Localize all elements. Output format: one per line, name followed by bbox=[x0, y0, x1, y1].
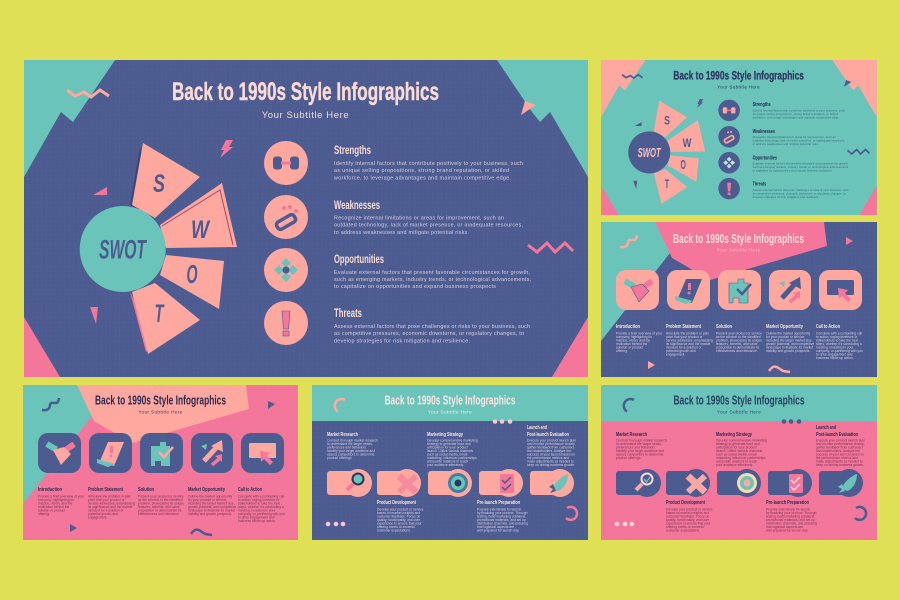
triangle lower left bbox=[90, 307, 98, 324]
icon: rocket bbox=[838, 474, 857, 493]
text: call to action: business follow-up action. bbox=[238, 519, 276, 523]
icon: scroll bbox=[675, 279, 702, 304]
text: solution: features, benefits, and value bbox=[716, 342, 758, 346]
text: marketing strategy: Develop comprehensive marketing bbox=[427, 438, 478, 442]
SWOT wedges: O bbox=[680, 157, 686, 172]
text: call to action: to drive engagement and bbox=[238, 516, 275, 520]
icon: rocket bbox=[549, 474, 568, 493]
text: marketing strategy: your audience effectively. bbox=[716, 463, 753, 467]
text: problem statement: potential growth and bbox=[666, 349, 696, 353]
text: solution: proposition to demonstrate its bbox=[716, 346, 760, 350]
text blocks: as competitive pressures, economic downturns, or regulatory changes, to bbox=[753, 191, 846, 195]
circle: SWOT: SWOT bbox=[638, 145, 661, 160]
text blocks: such as emerging markets, industry trends, or technological advancements, bbox=[753, 165, 849, 169]
text: call to action: to action, urging investors or bbox=[816, 335, 858, 339]
text: marketing strategy: such as social media, email bbox=[716, 452, 757, 456]
text: pre-launch preparation: promotional materials, and set up bbox=[477, 518, 526, 522]
title: Back to 1990s Style Infographics bbox=[384, 394, 516, 408]
text: market research bbox=[616, 432, 667, 460]
panel: teal SWOT slide bbox=[601, 60, 877, 215]
text: launch and evaluation: the performance metrics and bbox=[816, 456, 858, 460]
text: marketing strategy: Develop comprehensive marketing bbox=[716, 438, 767, 442]
text: product development: Product Development bbox=[666, 500, 705, 506]
text: product development: customer feedback. Focus on bbox=[666, 514, 709, 518]
text: problem statement: demand for a solution or bbox=[88, 508, 124, 512]
text: pre-launch preparation: that logistical aspects are bbox=[477, 525, 514, 529]
text: product development: Product Development bbox=[377, 500, 416, 506]
text: launch and evaluation: gather feedback from customers bbox=[816, 446, 864, 450]
text: market opportunity: including the target market size, bbox=[188, 502, 235, 506]
text: problem statement: its significance and the market bbox=[88, 505, 132, 509]
text: introduction: offering. bbox=[616, 349, 628, 353]
text block: weaknesses bbox=[334, 200, 524, 236]
text: call to action: meeting, investing in your bbox=[238, 508, 276, 512]
text: market research: Identify your target audience and bbox=[616, 449, 664, 453]
text: pre-launch preparation: well-prepared for launch day. bbox=[766, 528, 808, 532]
text: pre-launch preparation: that logistical aspects are bbox=[766, 525, 803, 529]
text: market opportunity: landscape to illustrate its market bbox=[188, 508, 235, 512]
text: launch and evaluation: Launch and bbox=[527, 425, 547, 431]
text: launch and evaluation: success of your launch based on bbox=[816, 452, 864, 456]
icon row bbox=[718, 100, 740, 199]
text: market opportunity: growth potential, and competitive bbox=[766, 342, 814, 346]
zigzag top left bbox=[67, 90, 109, 97]
text: launch and evaluation: and stakeholders. Analyze the bbox=[527, 449, 571, 453]
title: Back to 1990s Style Infographics bbox=[673, 69, 804, 83]
text: market research: preferences and behaviors. bbox=[616, 446, 656, 450]
text: marketing strategy bbox=[427, 432, 478, 467]
text: introduction: solution or product bbox=[38, 508, 65, 512]
text: call to action: Conclude with a compelling call bbox=[816, 332, 862, 336]
text: problem statement: Problem Statement bbox=[666, 324, 701, 330]
text blocks: Threats bbox=[753, 182, 766, 188]
text: introduction: company, highlighting its bbox=[38, 498, 74, 502]
text: market opportunity: growth potential, and competitive bbox=[188, 505, 236, 509]
text: introduction: motivation behind the bbox=[616, 342, 648, 346]
title: Back to 1990s Style Infographics bbox=[674, 394, 805, 408]
icon: target bbox=[448, 473, 468, 493]
circle: SWOT bbox=[80, 206, 166, 292]
text block: weaknesses: Weaknesses bbox=[334, 200, 380, 212]
icon tabs bbox=[616, 469, 863, 497]
text: call to action: to action, urging investors or bbox=[238, 498, 280, 502]
text: market research: Conduct thorough market research bbox=[327, 438, 378, 442]
wedge: S: S bbox=[153, 170, 165, 198]
text: pre-launch preparation: Prepare extensively for launch bbox=[477, 508, 522, 512]
text block: weaknesses: to address weaknesses and mitigate potential risks. bbox=[334, 230, 469, 236]
icon: scroll bbox=[97, 442, 124, 467]
text blocks: to address weaknesses and mitigate potential risks. bbox=[753, 142, 819, 146]
text: problem statement: engagement. bbox=[666, 352, 685, 356]
text: marketing strategy: strategy to generate buzz and bbox=[716, 442, 760, 446]
title: Back to 1990s Style Infographics bbox=[95, 394, 226, 408]
zigzag right bbox=[528, 243, 573, 252]
text: call to action: company, or partnering with you bbox=[238, 512, 285, 516]
subtitle: Your Subtitle Here bbox=[716, 248, 761, 254]
text: call to action bbox=[238, 487, 285, 523]
text: pre-launch preparation: Pre-launch Preparation bbox=[766, 500, 809, 506]
text: problem statement: demand for a solution or bbox=[666, 346, 702, 350]
text: launch and evaluation: Launch and bbox=[816, 425, 836, 431]
text block: opportunities bbox=[334, 254, 532, 290]
text: marketing strategy bbox=[716, 432, 767, 467]
text: market research: product offerings. bbox=[616, 456, 641, 460]
text: launch and evaluation: Execute your product launch plan bbox=[527, 438, 576, 442]
text block: weaknesses: Recognize internal limitations or areas for improvement, such an bbox=[334, 216, 504, 222]
wedge: T: T bbox=[154, 300, 165, 328]
text blocks: to capitalize on opportunities and expand business prospects bbox=[753, 168, 832, 172]
text block: threats: Assess external factors that pose challenges or risks to your business, such bbox=[334, 324, 530, 330]
icon: magnifier bbox=[636, 474, 652, 490]
text: problem statement: point that your product or bbox=[88, 498, 126, 502]
SWOT wedges: T bbox=[665, 177, 670, 191]
text: product development: customer expectations. bbox=[377, 528, 411, 532]
text: launch and evaluation bbox=[816, 425, 865, 467]
text: marketing strategy: your audience effectively. bbox=[427, 463, 464, 467]
text: market opportunity: viability and growth prospects. bbox=[188, 512, 232, 516]
icon: target bbox=[737, 473, 757, 493]
text: market research: preferences and behaviors. bbox=[327, 446, 367, 450]
text blocks: Recognize internal limitations or areas for improvement, such an bbox=[753, 135, 836, 139]
text: solution: Solution bbox=[138, 487, 154, 493]
text: call to action bbox=[816, 324, 863, 360]
icon: dumbbell bbox=[264, 141, 308, 185]
text: market opportunity: including the target market size, bbox=[766, 338, 813, 342]
text: product development: based on market insights and bbox=[666, 511, 709, 515]
SWOT wedges bbox=[654, 101, 705, 204]
text: introduction: mission, vision, and the bbox=[616, 338, 650, 342]
triangle top right bbox=[521, 101, 536, 115]
wedge: T bbox=[130, 283, 200, 354]
text: marketing strategy: launch. Utilize various channels bbox=[716, 449, 763, 453]
text blocks: workforce, to leverage advantages and maintain competitive edge. bbox=[753, 115, 839, 119]
text: launch and evaluation: Post-launch Evaluation bbox=[527, 432, 569, 438]
text: problem statement: service addresses, emphasizing bbox=[88, 502, 135, 506]
text block: strengths: Strengths bbox=[334, 145, 371, 157]
icon: screen with cursor bbox=[249, 443, 276, 465]
text: product development: customer feedback. Focus on bbox=[377, 514, 420, 518]
text: market opportunity: for your product or service, bbox=[766, 335, 805, 339]
text: pre-launch preparation: distribution channels, and ensuring bbox=[766, 522, 817, 526]
text: launch and evaluation: and monitor performance closely, bbox=[816, 442, 865, 446]
icon: lightning bbox=[220, 140, 233, 158]
text: problem statement: service addresses, emphasizing bbox=[666, 338, 713, 342]
text blocks: Strengths bbox=[753, 102, 771, 108]
cards with icons bbox=[616, 270, 862, 310]
text blocks: Opportunities bbox=[753, 155, 777, 161]
wedge: O bbox=[160, 255, 224, 309]
text: product development: based on market insights and bbox=[377, 511, 420, 515]
text: launch and evaluation: make adjustments as needed to bbox=[527, 460, 574, 464]
icon: exclamation bbox=[264, 301, 308, 345]
text: solution: effectiveness and relevance. bbox=[716, 349, 758, 353]
wedge: S bbox=[130, 143, 200, 218]
text block: strengths bbox=[333, 145, 523, 182]
wedge: O: O bbox=[186, 259, 198, 289]
panel: pink timeline slide bbox=[601, 385, 877, 540]
text: market opportunity: Outline the market opportunity bbox=[766, 332, 811, 336]
text: introduction bbox=[616, 324, 663, 353]
text: product development: customer expectations. bbox=[666, 528, 700, 532]
circle: SWOT bbox=[628, 131, 670, 173]
title: Back to 1990s Style Infographics bbox=[673, 232, 804, 246]
text: product development: quality, functionality, and user bbox=[666, 518, 710, 522]
text block: strengths: as unique selling propositions, strong brand reputation, or skilled bbox=[334, 168, 509, 174]
icon tabs bbox=[327, 469, 574, 497]
text: product development bbox=[377, 500, 424, 532]
text: market opportunity: landscape to illustrate its market bbox=[766, 346, 813, 350]
text: pre-launch preparation bbox=[766, 500, 817, 532]
text: launch and evaluation: and stakeholders. Analyze the bbox=[816, 449, 860, 453]
text: pre-launch preparation: testing, build marketing collateral, bbox=[766, 514, 815, 518]
text: market opportunity: Market Opportunity bbox=[188, 487, 225, 493]
text block: opportunities: to capitalize on opportunities and expand business prospects bbox=[334, 284, 496, 290]
text: marketing strategy: Marketing Strategy bbox=[716, 432, 752, 438]
text blocks: as unique selling propositions, strong brand reputation, or skilled bbox=[753, 112, 839, 116]
text block: opportunities: such as emerging markets, industry trends, or technological advancements, bbox=[334, 277, 532, 283]
text: market research: Market Research bbox=[327, 432, 358, 438]
text: call to action: company, or partnering with you bbox=[816, 349, 863, 353]
icon: handshake bbox=[45, 441, 76, 465]
text block: opportunities: Evaluate external factors that present favorable circumstances for growth, bbox=[334, 270, 530, 276]
text: call to action: stakeholders to take the next bbox=[816, 338, 858, 342]
text: problem statement bbox=[666, 324, 713, 356]
icon: arrows bbox=[201, 440, 223, 465]
text: introduction: Provide a brief overview of your bbox=[38, 494, 85, 498]
text: launch and evaluation: keep on driving business growth. bbox=[816, 463, 864, 467]
text: marketing strategy: anticipation for your product bbox=[716, 446, 757, 450]
icon: screen with cursor bbox=[827, 280, 854, 302]
text: marketing strategy: marketing, influencer partnerships bbox=[427, 456, 477, 460]
text: market research: Conduct thorough market research bbox=[616, 438, 667, 442]
text: launch and evaluation: gather feedback from customers bbox=[527, 446, 575, 450]
icon: puzzle bbox=[729, 279, 751, 303]
panel: navy timeline slide bbox=[312, 385, 588, 540]
text block: opportunities: Opportunities bbox=[334, 254, 384, 266]
text: product development: experience to ensure that your bbox=[666, 522, 711, 526]
text: pre-launch preparation: distribution channels, and ensuring bbox=[477, 522, 528, 526]
text: solution: problem, showcasing its unique bbox=[138, 502, 184, 506]
text: market research: to understand the target needs, bbox=[327, 442, 373, 446]
text: call to action: Call to Action bbox=[238, 487, 262, 493]
text: market opportunity: Market Opportunity bbox=[766, 324, 803, 330]
icon: pencil and ruler bbox=[399, 476, 416, 492]
text: market research: assess competitors to determine bbox=[327, 452, 375, 456]
text: solution: as the solution to the identified bbox=[138, 498, 183, 502]
text: pre-launch preparation: well-prepared for launch day. bbox=[477, 528, 519, 532]
text: launch and evaluation: keep on driving business growth. bbox=[527, 463, 575, 467]
text: launch and evaluation: make adjustments as needed to bbox=[816, 460, 863, 464]
text: market research: product offerings. bbox=[327, 456, 352, 460]
text: pre-launch preparation: Pre-launch Preparation bbox=[477, 500, 520, 506]
text: solution bbox=[138, 487, 184, 516]
text: product development bbox=[666, 500, 713, 532]
text: introduction: Introduction bbox=[38, 487, 62, 493]
text block: threats bbox=[334, 308, 530, 344]
text: problem statement: its significance and the market bbox=[666, 342, 710, 346]
text: introduction: company, highlighting its bbox=[616, 335, 652, 339]
text: marketing strategy: and public relations to reach bbox=[716, 460, 757, 464]
text: market opportunity bbox=[766, 324, 814, 353]
text: problem statement: Articulate the problem or pain bbox=[88, 494, 131, 498]
text block: threats: Threats bbox=[334, 308, 362, 320]
text: product development: quality, functionality, and user bbox=[377, 518, 421, 522]
text: product development: Develop your product or service bbox=[666, 508, 713, 512]
text block: weaknesses: outdated technology, lack of market presence, or inadequate resources, bbox=[334, 222, 524, 228]
text: marketing strategy: launch. Utilize various channels bbox=[427, 449, 474, 453]
text blocks bbox=[753, 102, 849, 199]
text: solution: features, benefits, and value bbox=[138, 505, 180, 509]
text: pre-launch preparation bbox=[477, 500, 528, 532]
text: problem statement: Articulate the problem or pain bbox=[666, 332, 709, 336]
text: market research bbox=[327, 432, 378, 460]
text: product development: Develop your product or service bbox=[377, 508, 424, 512]
text blocks: Evaluate external factors that present favorable circumstances for growth, bbox=[753, 162, 849, 166]
panel: main SWOT slide bbox=[24, 60, 588, 377]
panel: pink five-card slide bbox=[23, 385, 298, 540]
icon: clipboard bbox=[500, 474, 514, 493]
text: marketing strategy: and public relations to reach bbox=[427, 460, 468, 464]
text: introduction: Introduction bbox=[616, 324, 640, 330]
text: solution bbox=[716, 324, 762, 353]
text: call to action: Conclude with a compelling call bbox=[238, 494, 284, 498]
text: call to action: business follow-up action. bbox=[816, 356, 854, 360]
text: introduction: motivation behind the bbox=[38, 505, 70, 509]
subtitle: Your Subtitle Here bbox=[717, 410, 761, 416]
text: pre-launch preparation: promotional materials, and set up bbox=[766, 518, 815, 522]
text blocks: Assess external factors that pose challenges or risks to your business, such bbox=[753, 188, 849, 192]
text: introduction: solution or product bbox=[616, 346, 643, 350]
text: market opportunity bbox=[188, 487, 236, 516]
subtitle: Your Subtitle Here bbox=[428, 410, 472, 416]
text: introduction: Provide a brief overview of your bbox=[616, 332, 663, 336]
icon: clipboard bbox=[789, 474, 803, 493]
text: marketing strategy: Marketing Strategy bbox=[427, 432, 463, 438]
text: market opportunity: viability and growth prospects. bbox=[766, 349, 810, 353]
text: problem statement: point that your product or bbox=[666, 335, 704, 339]
text blocks: Identify internal factors that contribute positively to your business, such bbox=[753, 108, 846, 112]
text: launch and evaluation: and monitor performance closely, bbox=[527, 442, 576, 446]
text: pre-launch preparation: by finalizing your product. Through bbox=[766, 511, 817, 515]
subtitle: Your Subtitle Here bbox=[138, 410, 183, 416]
text: pre-launch preparation: Prepare extensively for launch bbox=[766, 508, 811, 512]
text: market research: assess competitors to determine bbox=[616, 452, 664, 456]
text: marketing strategy: strategy to generate buzz and bbox=[427, 442, 471, 446]
text: solution: effectiveness and relevance. bbox=[138, 512, 180, 516]
icon: puzzle bbox=[151, 442, 173, 466]
icon: broken link bbox=[264, 195, 308, 239]
text: marketing strategy: such as social media, email bbox=[427, 452, 468, 456]
text: call to action: steps, whether it's scheduling a bbox=[238, 505, 284, 509]
subtitle: Your Subtitle Here bbox=[717, 84, 760, 89]
text blocks: develop strategies for risk mitigation and resilience. bbox=[753, 195, 819, 199]
text blocks: outdated technology, lack of market presence, or inadequate resources, bbox=[753, 138, 845, 142]
circle: SWOT: SWOT bbox=[99, 234, 147, 264]
text: introduction: offering. bbox=[38, 512, 50, 516]
text: market research: Identify your target audience and bbox=[327, 449, 375, 453]
text: solution: Present your product or service bbox=[716, 332, 762, 336]
text: product development: offering meets or exceeds bbox=[377, 525, 415, 529]
text: call to action: meeting, investing in your bbox=[816, 346, 854, 350]
text: launch and evaluation: Execute your product launch plan bbox=[816, 438, 865, 442]
text: problem statement bbox=[88, 487, 135, 520]
wedge: W: W bbox=[191, 216, 211, 244]
text block: strengths: workforce, to leverage advantages and maintain competitive edge. bbox=[333, 176, 511, 182]
text: product development: experience to ensure that your bbox=[377, 522, 422, 526]
text: market opportunity: Outline the market opportunity bbox=[188, 494, 233, 498]
text: launch and evaluation: Post-launch Evaluation bbox=[816, 432, 858, 438]
icon: arrows bbox=[779, 277, 801, 302]
text: call to action: stakeholders to take the next bbox=[238, 502, 280, 506]
text block: threats: develop strategies for risk mitigation and resilience. bbox=[334, 338, 470, 344]
panel: navy five-card slide bbox=[601, 222, 877, 377]
text: launch and evaluation bbox=[527, 425, 576, 467]
text: solution: Solution bbox=[716, 324, 732, 330]
text: market research: Market Research bbox=[616, 432, 647, 438]
text: market opportunity: for your product or service, bbox=[188, 498, 227, 502]
text: introduction bbox=[38, 487, 85, 516]
text: market research: to understand the target needs, bbox=[616, 442, 662, 446]
text: call to action: steps, whether it's scheduling a bbox=[816, 342, 862, 346]
triangle left bbox=[93, 187, 107, 195]
cards with icons bbox=[38, 433, 284, 473]
text: launch and evaluation: the performance metrics and bbox=[527, 456, 569, 460]
icon: diamonds bbox=[264, 248, 308, 292]
text: product development: offering meets or exceeds bbox=[666, 525, 704, 529]
text: call to action: to drive engagement and bbox=[816, 352, 853, 356]
text: pre-launch preparation: testing, build marketing collateral, bbox=[477, 514, 526, 518]
text: solution: problem, showcasing its unique bbox=[716, 338, 762, 342]
text: marketing strategy: anticipation for your product bbox=[427, 446, 468, 450]
wedge: W bbox=[160, 183, 237, 248]
text blocks: Weaknesses bbox=[753, 129, 775, 135]
text: launch and evaluation: success of your launch based on bbox=[527, 452, 575, 456]
text: solution: as the solution to the identified bbox=[716, 335, 761, 339]
text: problem statement: potential growth and bbox=[88, 512, 118, 516]
SWOT wedges: W bbox=[683, 136, 692, 150]
SWOT wedges: S bbox=[664, 114, 670, 128]
title: Back to 1990s Style Infographics bbox=[172, 78, 439, 106]
text: solution: Present your product or service bbox=[138, 494, 184, 498]
text: problem statement: Problem Statement bbox=[88, 487, 123, 493]
icon: magnifier bbox=[347, 474, 364, 490]
text block: strengths: Identify internal factors that contribute positively to your business, such bbox=[334, 161, 523, 167]
icon: handshake bbox=[623, 278, 654, 302]
text: solution: proposition to demonstrate its bbox=[138, 508, 182, 512]
text: pre-launch preparation: by finalizing your product. Through bbox=[477, 511, 528, 515]
text: problem statement: engagement. bbox=[88, 516, 107, 520]
icon: pencil and ruler bbox=[688, 476, 705, 492]
text: introduction: mission, vision, and the bbox=[38, 502, 72, 506]
text: call to action: Call to Action bbox=[816, 324, 840, 330]
text block: threats: as competitive pressures, economic downturns, or regulatory changes, to bbox=[334, 331, 524, 337]
subtitle: Your Subtitle Here bbox=[262, 110, 349, 121]
text: marketing strategy: marketing, influencer partnerships bbox=[716, 456, 766, 460]
